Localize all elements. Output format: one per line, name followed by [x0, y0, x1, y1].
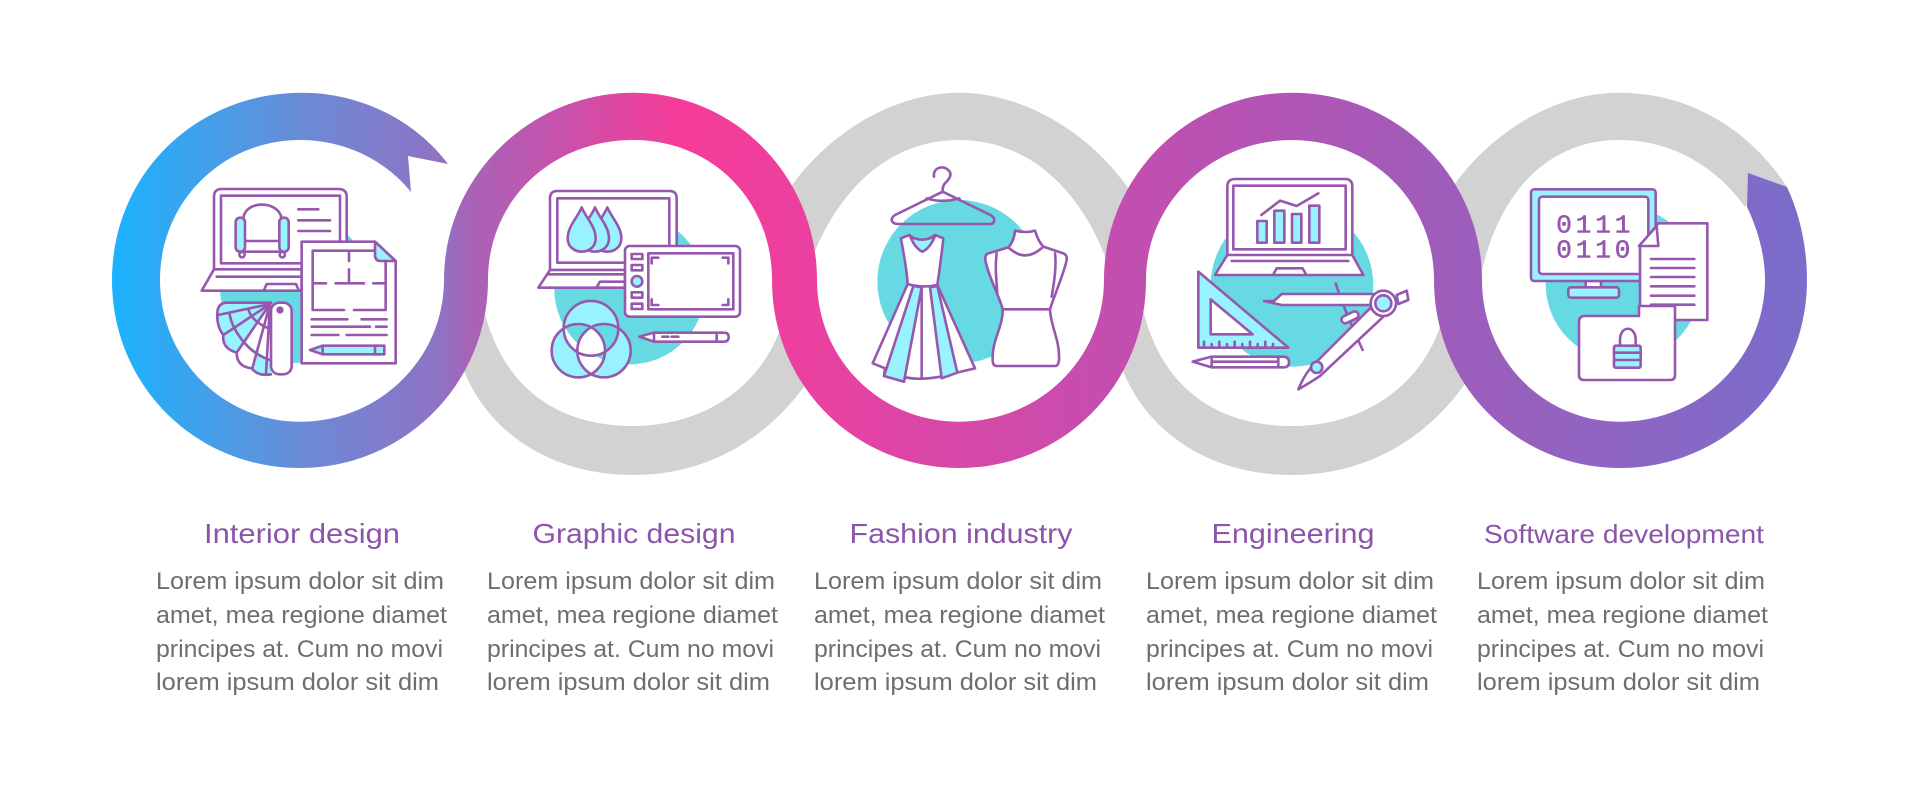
text block: graphic design: lorem ipsum dolor sit dim	[487, 669, 770, 696]
panel: interior design	[156, 518, 447, 696]
panel: engineering	[1146, 518, 1437, 696]
text block: graphic design: amet, mea regione diamet	[487, 602, 778, 629]
heading: software development: Software development	[1484, 519, 1765, 549]
heading: fashion industry: Fashion industry	[850, 518, 1072, 549]
text block: fashion industry	[814, 568, 1105, 696]
text block: interior design: amet, mea regione diamet	[156, 602, 447, 629]
icon: fashion	[873, 167, 1067, 382]
heading: engineering: Engineering	[1212, 518, 1374, 549]
gradient ribbon arrow	[112, 93, 1807, 468]
heading: interior design: Interior design	[204, 518, 400, 549]
binary digits on monitor: 0111	[1556, 211, 1630, 241]
text block: interior design: lorem ipsum dolor sit dim	[156, 669, 439, 696]
icon: interior design	[202, 189, 396, 375]
heading: graphic design: Graphic design	[532, 518, 736, 549]
text block: interior design: principes at. Cum no movi	[156, 636, 443, 663]
icon: engineering	[1193, 179, 1408, 389]
text block: graphic design: Lorem ipsum dolor sit dim	[487, 568, 775, 595]
text block: interior design: Lorem ipsum dolor sit dim	[156, 568, 444, 595]
icon: graphic design	[538, 191, 740, 377]
text block: graphic design	[487, 568, 778, 696]
icon: software development	[1531, 189, 1707, 380]
text block: fashion industry: lorem ipsum dolor sit dim	[814, 669, 1097, 696]
panel: software development	[1477, 519, 1768, 696]
text block: interior design	[156, 568, 447, 696]
panel: fashion industry	[814, 518, 1105, 696]
text block: engineering: lorem ipsum dolor sit dim	[1146, 669, 1429, 696]
text block: engineering	[1146, 568, 1437, 696]
grey background rings	[455, 93, 1787, 475]
text block: software development: principes at. Cum no movi	[1477, 636, 1764, 663]
text block: software development	[1477, 568, 1768, 696]
panel: graphic design	[487, 518, 778, 696]
text block: fashion industry: Lorem ipsum dolor sit dim	[814, 568, 1102, 595]
text block: fashion industry: principes at. Cum no movi	[814, 636, 1101, 663]
text block: fashion industry: amet, mea regione diamet	[814, 602, 1105, 629]
text block: software development: lorem ipsum dolor sit dim	[1477, 669, 1760, 696]
text block: graphic design: principes at. Cum no movi	[487, 636, 774, 663]
binary digits on monitor: 0110	[1556, 235, 1630, 265]
text block: software development: amet, mea regione diamet	[1477, 602, 1768, 629]
text block: engineering: principes at. Cum no movi	[1146, 636, 1433, 663]
binary digits on monitor	[1556, 211, 1630, 265]
text block: engineering: amet, mea regione diamet	[1146, 602, 1437, 629]
text block: software development: Lorem ipsum dolor sit dim	[1477, 568, 1765, 595]
text block: engineering: Lorem ipsum dolor sit dim	[1146, 568, 1434, 595]
